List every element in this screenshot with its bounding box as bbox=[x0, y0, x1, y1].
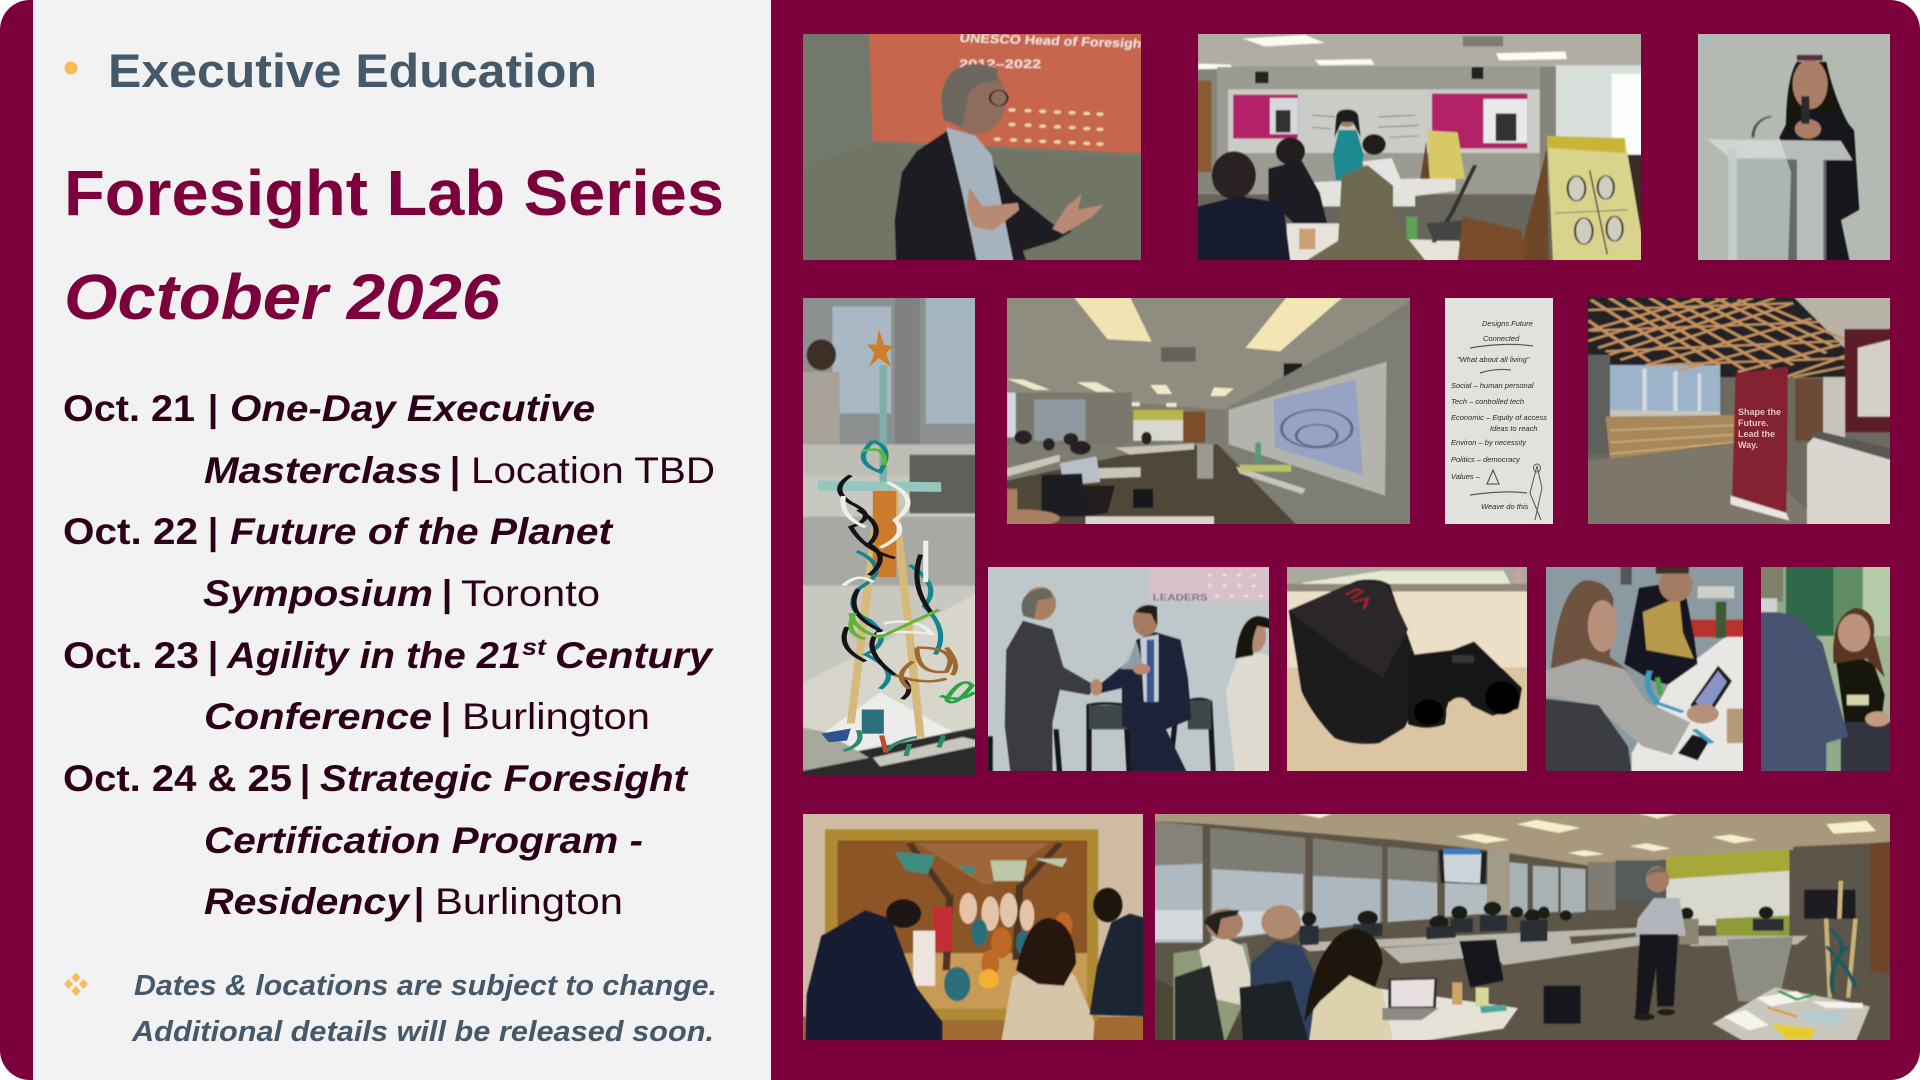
photo: handwritten whiteboard notes: Values – bbox=[1451, 472, 1481, 481]
schedule: Oct. 24 and 25: Burlington bbox=[435, 881, 623, 922]
schedule: Oct. 21 bbox=[63, 388, 715, 492]
photo: classroom with facilitator and easels bbox=[1198, 34, 1641, 260]
photo: handwritten whiteboard notes bbox=[1445, 298, 1553, 524]
schedule: Oct. 23 bbox=[63, 634, 715, 738]
schedule: Oct. 22: Oct. 22 bbox=[63, 511, 198, 552]
photo: handwritten whiteboard notes: Economic – Equity of access bbox=[1451, 413, 1547, 422]
schedule: Oct. 23: Oct. 23 bbox=[63, 635, 199, 676]
schedule: Oct. 24 and 25: Oct. 24 & 25 bbox=[63, 758, 292, 799]
schedule: Oct. 22: Toronto bbox=[461, 573, 600, 614]
photo: pipe cleaner tower model bbox=[803, 298, 975, 775]
photo: group viewing large painting bbox=[803, 814, 1143, 1040]
banner slogan: Future. bbox=[1738, 418, 1768, 428]
photo: handshake award presentation bbox=[988, 567, 1269, 771]
photo: handwritten whiteboard notes: Environ – by necessity bbox=[1451, 438, 1527, 447]
schedule: Oct. 22: | bbox=[442, 573, 452, 615]
photo: wide classroom with projection screen bbox=[1007, 298, 1410, 524]
schedule: Oct. 21: Oct. 21 bbox=[63, 388, 195, 429]
banner slogan bbox=[1738, 407, 1781, 450]
schedule: Oct. 21: One-Day Executive bbox=[230, 388, 595, 429]
banner slogan: Shape the bbox=[1738, 407, 1781, 417]
subtitle: October 2026: October 2026 bbox=[64, 261, 500, 333]
schedule: Oct. 23: st bbox=[522, 634, 548, 660]
schedule: Oct. 24 and 25: | bbox=[414, 881, 424, 923]
photo: handwritten whiteboard notes: Ideas to reach bbox=[1490, 424, 1538, 433]
schedule: Oct. 23: | bbox=[441, 696, 451, 738]
photo: handshake award presentation: LEADERS bbox=[1153, 593, 1208, 603]
schedule: Oct. 24 and 25: Strategic Foresight bbox=[320, 758, 689, 799]
icon: orange bullet bbox=[64, 62, 78, 74]
schedule: Oct. 24 and 25: Certification Program - bbox=[204, 820, 643, 861]
photo: presenter at clear podium bbox=[1698, 34, 1890, 260]
schedule: Oct. 24 and 25: Residency bbox=[204, 881, 412, 922]
photo: handwritten whiteboard notes: Social – human personal bbox=[1451, 381, 1534, 390]
schedule: Oct. 22: Symposium bbox=[203, 573, 433, 614]
schedule: Oct. 23: Agility in the 21 bbox=[226, 635, 521, 676]
photo: handwritten whiteboard notes: Designs Future bbox=[1482, 319, 1533, 328]
photo: handwritten whiteboard notes: Politics – democracy bbox=[1451, 455, 1521, 464]
note: subject to change: Additional details will be released soon. bbox=[131, 1016, 714, 1048]
photo: networking conversation bbox=[1761, 567, 1890, 771]
photo: atrium with lattice ceiling and banner bbox=[1584, 296, 1896, 527]
banner slogan: Lead the bbox=[1738, 429, 1775, 439]
schedule: Oct. 21: Masterclass bbox=[204, 450, 442, 491]
banner slogan: Way. bbox=[1738, 440, 1758, 450]
schedule: Oct. 23: Conference bbox=[204, 696, 432, 737]
panel: event schedule text bbox=[33, 0, 771, 1080]
heading: Executive Education: Executive Education bbox=[108, 44, 597, 97]
schedule: Oct. 22: Future of the Planet bbox=[230, 511, 614, 552]
photo: handwritten whiteboard notes: "What about all living" bbox=[1457, 355, 1530, 364]
schedule: Oct. 21: Location TBD bbox=[471, 450, 715, 491]
schedule: Oct. 23: Burlington bbox=[462, 696, 650, 737]
schedule: Oct. 22 bbox=[63, 511, 614, 615]
note: subject to change bbox=[131, 970, 717, 1048]
schedule: Oct. 24 and 25 bbox=[63, 758, 689, 923]
schedule: Oct. 23: | bbox=[208, 635, 218, 677]
schedule: Oct. 23: Century bbox=[555, 635, 715, 676]
schedule: Oct. 21: | bbox=[450, 450, 460, 492]
photo: handwritten whiteboard notes: Connected bbox=[1483, 334, 1520, 343]
schedule: Oct. 24 and 25: | bbox=[300, 758, 310, 800]
title: Foresight Lab Series: Foresight Lab Series bbox=[64, 157, 724, 229]
note: subject to change: Dates & locations are subject to change. bbox=[134, 970, 717, 1002]
photo: speaker in front of UNESCO slide bbox=[803, 31, 1147, 260]
photo: handwritten whiteboard notes: Tech – controlled tech bbox=[1451, 397, 1524, 406]
schedule: Oct. 22: | bbox=[208, 511, 218, 553]
photo: participants with tablet at table bbox=[1546, 567, 1743, 771]
icon: four diamond bullet bbox=[64, 972, 88, 996]
photo: full workshop room with presenter bbox=[1155, 814, 1890, 1040]
schedule: Oct. 21: | bbox=[208, 388, 218, 430]
photo: speaker in front of UNESCO slide: 2012–2022 bbox=[959, 57, 1041, 71]
photo: binoculars and black pouch bbox=[1287, 567, 1527, 771]
photo: handwritten whiteboard notes: Weave do this bbox=[1481, 502, 1529, 511]
